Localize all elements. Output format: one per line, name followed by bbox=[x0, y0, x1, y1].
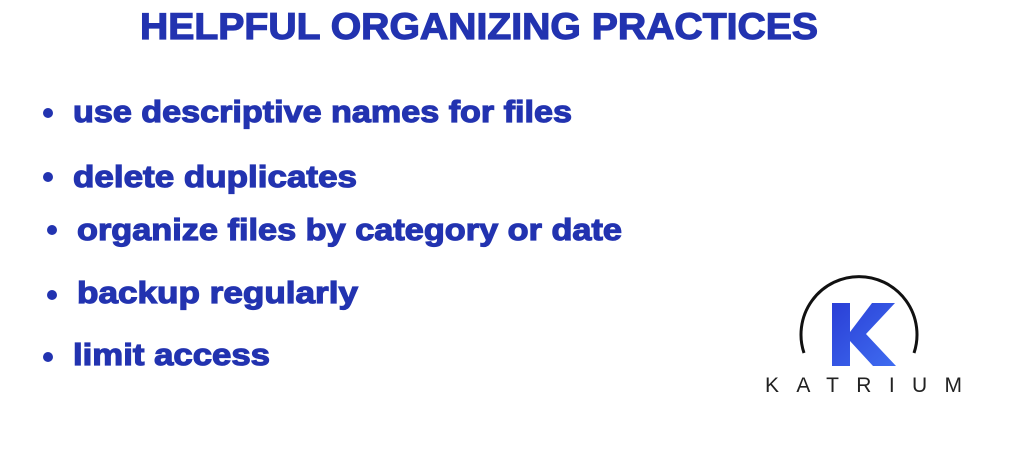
logo K bbox=[832, 303, 896, 366]
bullet 5: limit access bbox=[73, 337, 270, 372]
bullet 4: backup regularly bbox=[77, 275, 359, 310]
title: HELPFUL ORGANIZING PRACTICES bbox=[140, 6, 818, 47]
bullet 2: delete duplicates bbox=[73, 159, 357, 194]
logo arc bbox=[801, 277, 917, 353]
bullet list bbox=[43, 94, 622, 372]
bullet 1: use descriptive names for files bbox=[73, 94, 572, 129]
logo wordmark: KATRIUM bbox=[765, 374, 962, 397]
bullet 3: organize files by category or date bbox=[77, 212, 622, 247]
logo: Katrium bbox=[765, 277, 962, 397]
